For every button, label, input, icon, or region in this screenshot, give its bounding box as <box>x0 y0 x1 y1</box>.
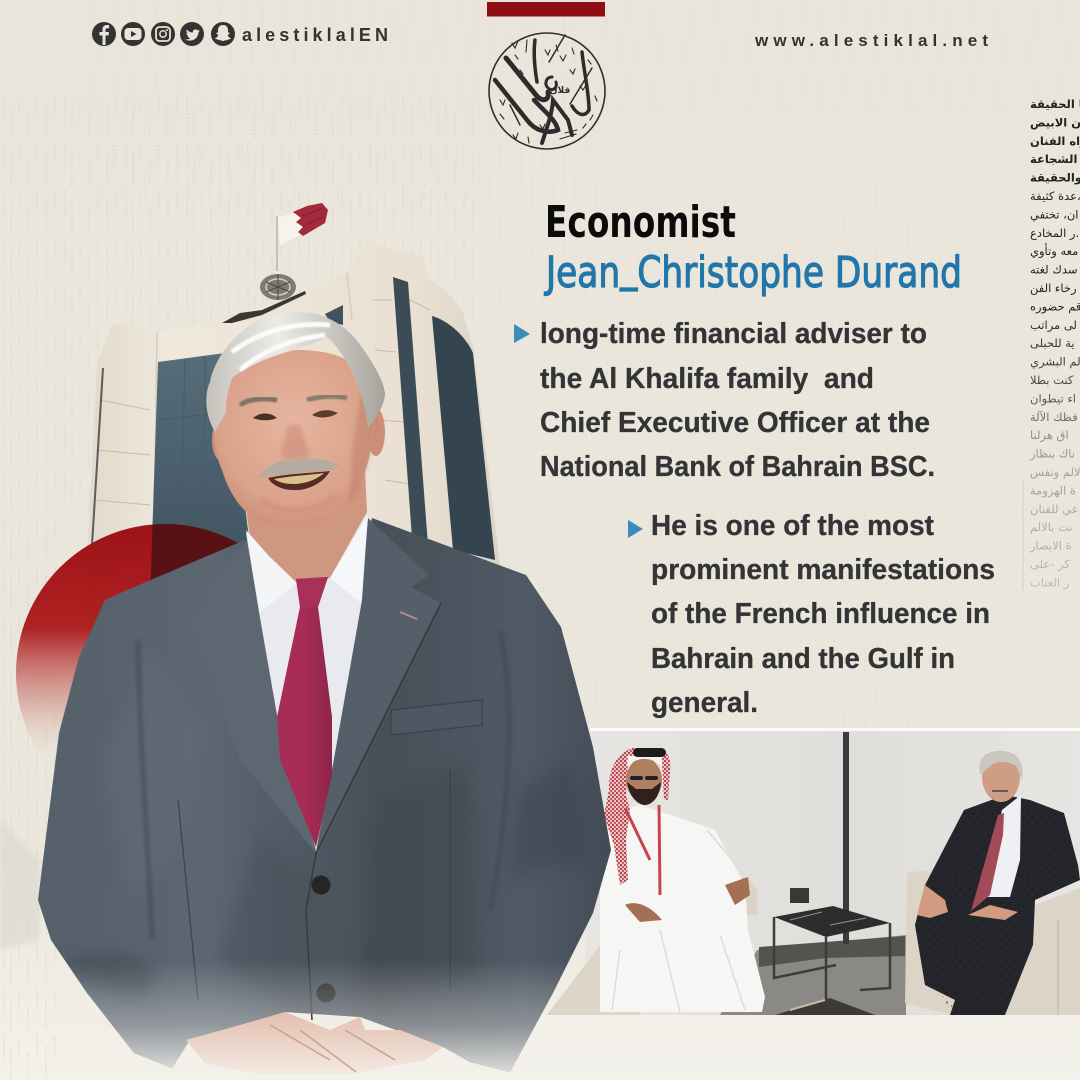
white frame line <box>590 728 1080 731</box>
social handle text: alestiklalEN <box>242 25 388 45</box>
breast pocket <box>391 700 482 735</box>
right glass <box>432 316 495 560</box>
shirt <box>976 795 1021 897</box>
newspaper Arabic text column: نت بالالم <box>1030 520 1073 534</box>
second text block: of the French influence in <box>651 598 990 630</box>
mouth <box>268 471 330 490</box>
first text block: the Al Khalifa family and <box>540 363 874 395</box>
floor <box>720 935 906 1015</box>
newspaper Arabic text column: الشجاعة <box>1030 152 1077 166</box>
newspaper Arabic text column: عدة كثيفة، <box>1030 189 1080 203</box>
eyebrows <box>240 399 277 405</box>
photo backdrop <box>585 731 1080 1015</box>
newspaper Arabic text column: سدك لغته <box>1030 263 1078 277</box>
left sofa <box>688 860 757 915</box>
floor lamp pole <box>843 732 849 944</box>
newspaper Arabic text column: لى مراتب <box>1030 318 1077 333</box>
marble table <box>774 906 890 1015</box>
window strip <box>393 277 428 545</box>
icon: facebook <box>92 22 116 46</box>
jacket buttons <box>312 876 330 894</box>
collar <box>246 530 297 612</box>
newspaper Arabic text column: اء تيطوان <box>1030 391 1076 406</box>
second text block <box>628 510 995 719</box>
first text block <box>514 318 935 483</box>
social media handle row <box>92 22 388 46</box>
flag <box>278 212 306 245</box>
newspaper Arabic text column: ية للحبلى <box>1030 336 1075 350</box>
newspaper Arabic text column: قم حضوره <box>1030 299 1080 314</box>
jacket <box>38 518 611 1072</box>
wall socket <box>790 888 809 903</box>
second text block: He is one of the most <box>651 510 934 542</box>
roof equipment <box>222 291 306 323</box>
second text block: general. <box>651 687 758 719</box>
newspaper Arabic text column: ة الهزومة <box>1030 483 1076 498</box>
newspaper Arabic text column: فظك الآلة <box>1030 410 1078 424</box>
second text block: prominent manifestations <box>651 554 995 586</box>
hands <box>625 903 662 922</box>
right armchair <box>905 870 1080 1015</box>
newspaper Arabic text column: كر -على <box>1030 557 1070 572</box>
red top bar <box>487 2 605 16</box>
head <box>982 752 1020 802</box>
logo: calligraphic roundel <box>489 33 605 149</box>
icon: twitter <box>180 22 204 46</box>
title: name: Jean <box>546 248 639 298</box>
newspaper Arabic text column: ان، تختفي <box>1030 207 1079 221</box>
newspaper Arabic text column: كنت بطلا <box>1030 373 1074 387</box>
red circle <box>16 524 250 744</box>
title: Economist: Economist <box>545 197 736 248</box>
newspaper Arabic text column: معه وتأوي <box>1030 243 1078 259</box>
moustache <box>258 459 339 478</box>
newspaper Arabic text column: رخاء الفن <box>1030 281 1076 296</box>
hair <box>206 312 385 432</box>
hands <box>917 885 948 918</box>
tie <box>277 577 332 847</box>
photo grain on suit <box>915 810 1078 1015</box>
newspaper Arabic text column: ر العتاب <box>1030 575 1069 590</box>
lower fade <box>71 967 565 1072</box>
neck <box>244 470 367 583</box>
building with flag <box>85 203 500 620</box>
newspaper Arabic text column: اق هرلنا <box>1030 428 1069 443</box>
logo: calligraphic roundel: قلال <box>550 86 570 96</box>
tower body <box>85 242 500 620</box>
man in white thobe <box>600 748 765 1012</box>
icon: instagram <box>151 22 175 46</box>
newspaper Arabic text column: ة الابصار <box>1029 539 1072 554</box>
eyes <box>253 414 277 420</box>
website address: www.alestiklal.net <box>754 31 988 50</box>
shirt <box>246 515 368 850</box>
bullet arrow <box>628 520 643 538</box>
newspaper Arabic text column: عي للفنان <box>1030 502 1079 516</box>
face <box>626 758 662 802</box>
icon: snapchat <box>211 22 235 46</box>
first text block: Chief Executive Officer at the <box>540 407 930 439</box>
title: name: _ <box>619 242 638 292</box>
left lapel <box>190 540 316 853</box>
face <box>213 350 376 527</box>
centre glass <box>150 353 250 600</box>
bullet arrow <box>514 324 530 343</box>
clasped hands <box>186 1012 443 1073</box>
newspaper Arabic text column <box>1023 97 1080 590</box>
first text block: National Bank of Bahrain BSC. <box>540 451 935 483</box>
ears <box>212 420 228 460</box>
second text block: Bahrain and the Gulf in <box>651 643 955 675</box>
agal <box>633 748 666 757</box>
left narrow window <box>91 368 104 545</box>
headscarf <box>604 748 670 885</box>
lanyard <box>625 805 660 895</box>
man in dark suit <box>915 751 1080 1015</box>
nose <box>281 425 310 460</box>
flagpole <box>276 216 278 271</box>
head <box>206 312 385 527</box>
newspaper Arabic text column: ناك بنظار <box>1029 447 1075 462</box>
title: name: Christophe Durand <box>637 248 962 298</box>
icon: youtube <box>121 22 145 46</box>
main portrait of the economist <box>30 312 620 1080</box>
photo: two men meeting <box>547 728 1080 1015</box>
right lapel <box>316 518 441 853</box>
light base strip under the photo <box>530 1015 1080 1080</box>
tie <box>971 813 1004 911</box>
first text block: long-time financial adviser to <box>540 318 927 350</box>
